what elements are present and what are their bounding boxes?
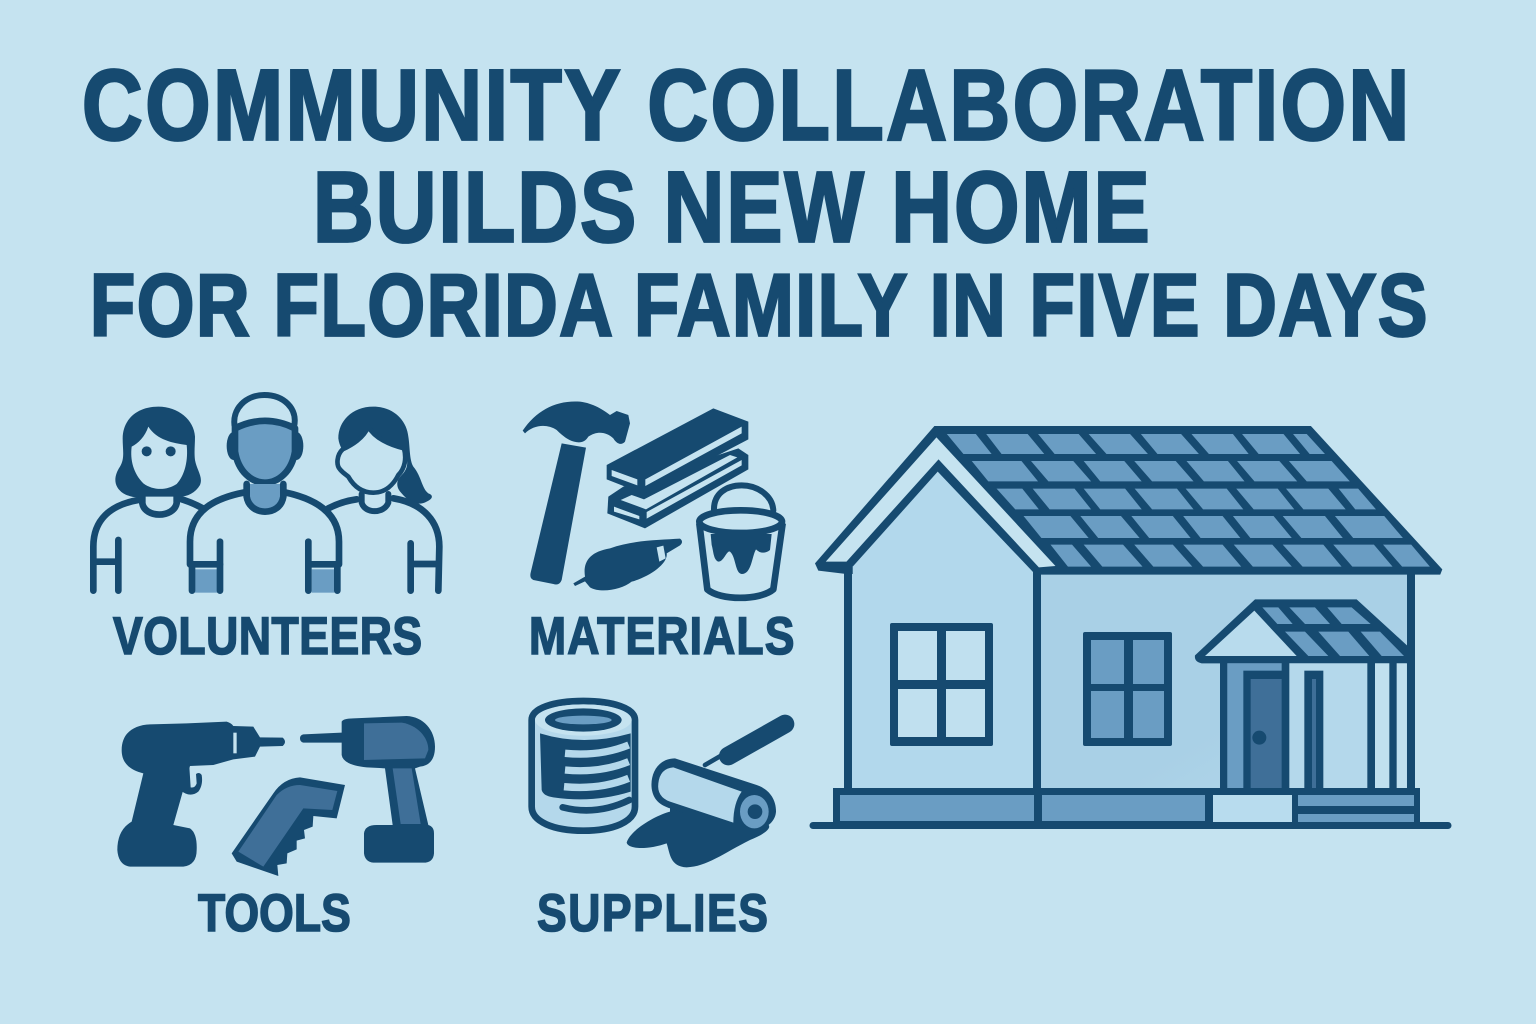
wall outlines	[844, 568, 1415, 792]
paint can	[532, 701, 635, 831]
title line 3: FOR FLORIDA FAMILY IN FIVE DAYS	[90, 257, 1427, 355]
title	[82, 49, 1427, 355]
paint bucket	[699, 485, 783, 598]
icon: three volunteers	[93, 395, 439, 593]
paint spill	[627, 803, 769, 867]
right woman	[328, 407, 439, 591]
center man with cap	[190, 395, 339, 593]
panel: volunteers	[93, 395, 439, 666]
lumber boards	[607, 408, 748, 528]
title line 2: BUILDS NEW HOME	[313, 151, 1150, 263]
label: volunteers: VOLUNTEERS	[113, 607, 422, 666]
right drill	[300, 716, 435, 863]
label: tools: TOOLS	[198, 884, 351, 943]
icon: hammer, lumber, caulk and paint bucket	[523, 401, 783, 598]
porch interior	[1288, 663, 1368, 788]
hand saw	[232, 777, 345, 876]
label: materials: MATERIALS	[529, 607, 794, 666]
right wall	[1037, 570, 1411, 792]
roof shingles	[947, 434, 1430, 567]
paint roller	[651, 724, 785, 832]
caulk tube	[573, 539, 682, 590]
panel: materials	[523, 401, 794, 666]
right window	[1083, 632, 1172, 746]
illustration: new house	[810, 426, 1452, 829]
icon: paint can and roller	[532, 701, 785, 867]
title line 1: COMMUNITY COLLABORATION	[82, 49, 1409, 161]
porch with door and columns	[1195, 599, 1408, 788]
porch roof	[1195, 599, 1408, 663]
porch columns	[1220, 662, 1397, 788]
left drill	[117, 722, 285, 867]
left window	[890, 623, 993, 746]
left woman	[93, 407, 203, 591]
icon: drills and saw	[117, 716, 435, 876]
main roof and gable	[815, 426, 1442, 580]
foundation and ground line	[810, 788, 1452, 829]
panel: tools	[117, 716, 435, 943]
panel: supplies	[532, 701, 785, 943]
door	[1243, 671, 1287, 788]
gable wall fill	[852, 574, 1033, 790]
label: supplies: SUPPLIES	[537, 884, 768, 943]
hammer	[523, 401, 630, 584]
